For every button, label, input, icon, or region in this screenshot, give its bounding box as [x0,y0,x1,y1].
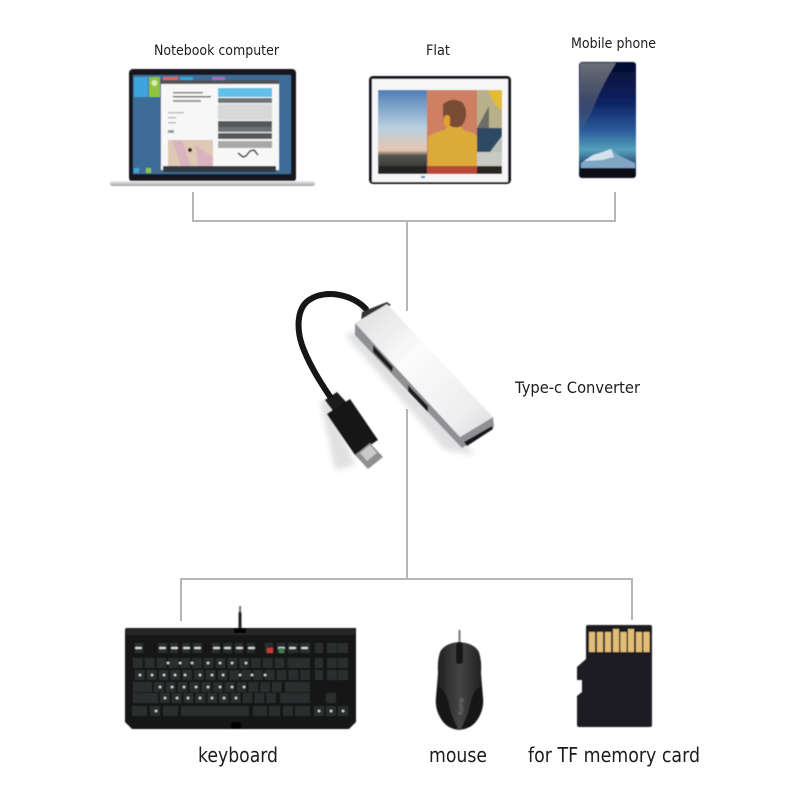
icon: TF memory card [577,625,652,727]
gold contacts [589,629,650,652]
cable [299,294,366,398]
keys [132,648,348,711]
icon: tablet [369,76,511,184]
connector lines: converter to bottom devices [181,409,632,621]
hub body [355,302,494,448]
label: for TF memory card: for TF memory card [528,743,700,767]
plug [325,392,383,469]
icon: laptop [110,69,315,186]
icon: mouse: Ramp [458,697,465,715]
icon: mouse [436,630,483,730]
icon: mobile phone [579,62,636,178]
icon: type-c converter [299,294,494,470]
label: mouse: mouse [429,743,487,767]
soft shadow [320,330,475,470]
label: Type-c Converter: Type-c Converter [514,378,640,397]
label: Mobile phone: Mobile phone [571,36,656,52]
label: Notebook computer: Notebook computer [154,43,279,59]
icon: keyboard [125,606,356,729]
key legends [136,648,343,711]
label: keyboard: keyboard [198,743,278,767]
label: Flat: Flat [426,43,450,59]
connector lines: top devices to converter [193,192,615,311]
